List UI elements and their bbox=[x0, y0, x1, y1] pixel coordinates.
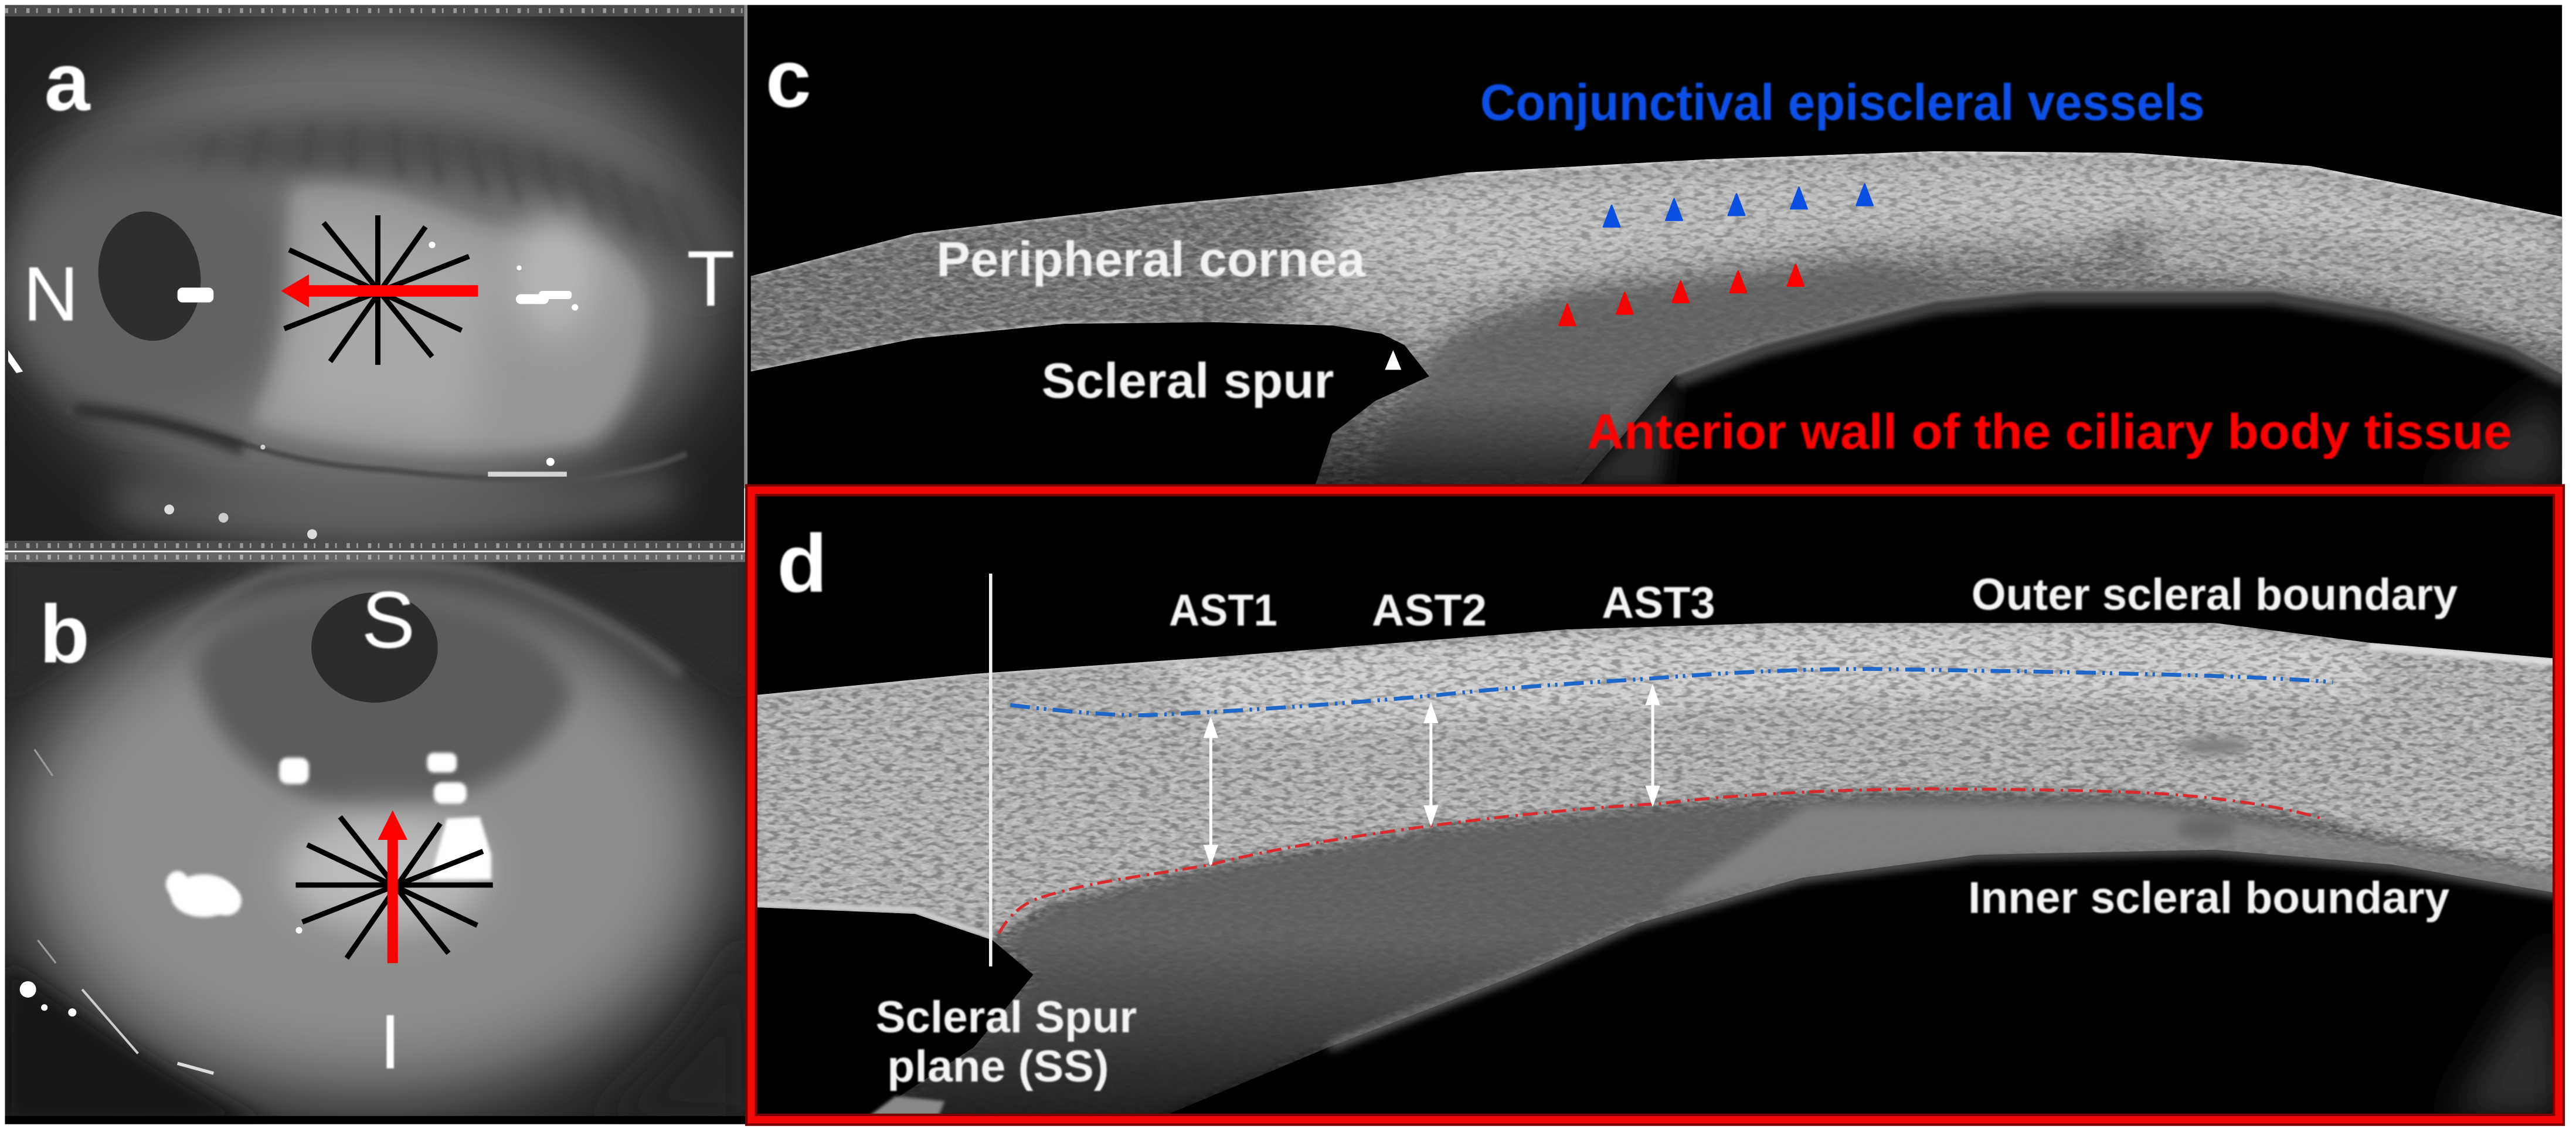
reflections a bbox=[8, 242, 578, 539]
label: I: I bbox=[379, 998, 401, 1084]
arrowhead: scleral spur bbox=[1385, 350, 1401, 370]
arrow: AST2 bbox=[1423, 702, 1438, 827]
label: a: a bbox=[45, 36, 91, 128]
label: conjunctival episcleral vessels: Conjunctival episcleral vessels bbox=[1480, 74, 2205, 131]
ciliary cavity d bbox=[1134, 850, 2566, 1134]
label: scleral spur plane: Scleral Spur bbox=[876, 993, 1137, 1042]
label: peripheral cornea: Peripheral cornea bbox=[936, 232, 1366, 287]
panel b: vertical eye photograph bbox=[5, 552, 747, 1124]
arrow: red scan direction a bbox=[281, 274, 478, 307]
icon: pupil a bbox=[98, 211, 200, 341]
label: anterior wall of the ciliary body tissue: Anterior wall of the ciliary body tissue bbox=[1587, 404, 2512, 459]
panel d: annotated OCT scan with red frame bbox=[751, 490, 2566, 1134]
label: AST1: AST1 bbox=[1169, 586, 1277, 635]
reflections b bbox=[20, 750, 491, 1073]
line: scleral spur plane bbox=[990, 574, 991, 967]
arrowheads: ciliary body wall bbox=[1559, 265, 1804, 326]
panel c: OCT scan overview bbox=[744, 5, 2566, 493]
arrow: AST1 bbox=[1204, 717, 1218, 866]
label: AST3: AST3 bbox=[1602, 579, 1715, 628]
arrow: red scan direction b bbox=[378, 811, 407, 963]
label: inner scleral boundary: Inner scleral boundary bbox=[1968, 874, 2449, 923]
icon: pupil b bbox=[311, 592, 438, 703]
label: d: d bbox=[777, 517, 827, 609]
icon: radial scan pattern b bbox=[295, 817, 493, 958]
label: outer scleral boundary: Outer scleral boundary bbox=[1972, 571, 2458, 620]
spur tissue d bbox=[862, 1096, 944, 1121]
label: S: S bbox=[362, 575, 415, 665]
smooth lower tissue c bbox=[1364, 263, 1972, 488]
arrow: AST3 bbox=[1645, 684, 1660, 807]
line: outer scleral boundary trace bbox=[1010, 669, 2333, 715]
arrowheads: conjunctival vessels bbox=[1603, 184, 1873, 227]
smooth lower tissue d bbox=[871, 795, 2333, 1121]
label: scleral spur plane: plane (SS) bbox=[887, 1042, 1109, 1091]
label: scleral spur plane bbox=[876, 993, 1137, 1091]
label: N: N bbox=[23, 250, 79, 337]
icon: radial scan pattern a bbox=[284, 215, 469, 365]
label: T: T bbox=[687, 234, 735, 323]
label: scleral spur: Scleral spur bbox=[1042, 353, 1334, 408]
label: AST2: AST2 bbox=[1372, 586, 1487, 635]
line: inner scleral boundary trace bbox=[999, 789, 2322, 934]
label: b: b bbox=[39, 588, 90, 680]
ciliary cavity c bbox=[1577, 291, 2566, 493]
label: c: c bbox=[766, 32, 811, 124]
panel a: horizontal eye photograph bbox=[5, 5, 744, 551]
